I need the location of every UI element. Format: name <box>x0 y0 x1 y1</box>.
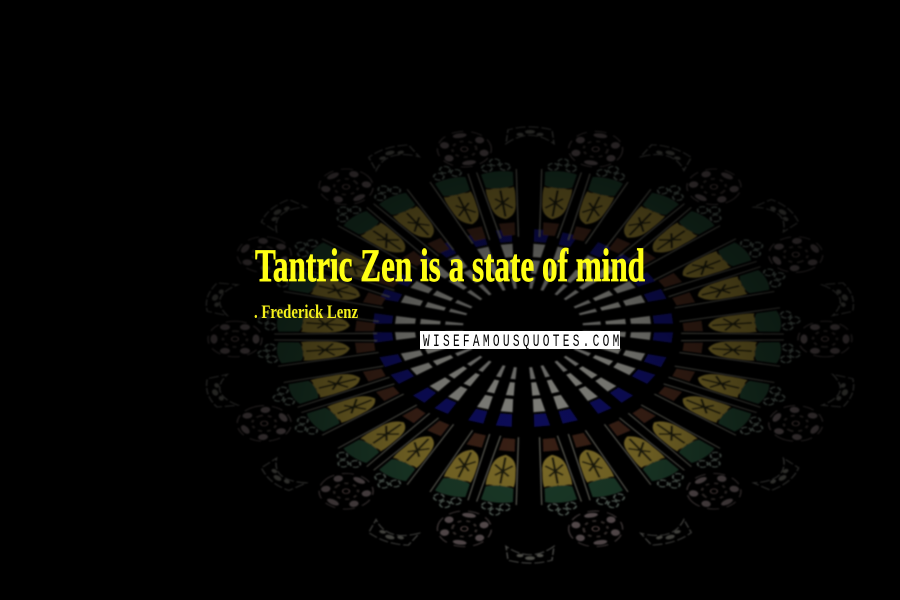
author attribution: . Frederick Lenz <box>254 302 358 323</box>
stained glass lancet panes <box>256 157 802 517</box>
outer rosettes <box>208 128 852 550</box>
quote text: Tantric Zen is a state of mind <box>255 240 645 292</box>
watermark: WISEFAMOUSQUOTES.COM <box>423 333 623 352</box>
radial white rays and blue ring <box>373 229 673 427</box>
outer spandrels <box>202 127 858 563</box>
rose window <box>202 127 858 563</box>
